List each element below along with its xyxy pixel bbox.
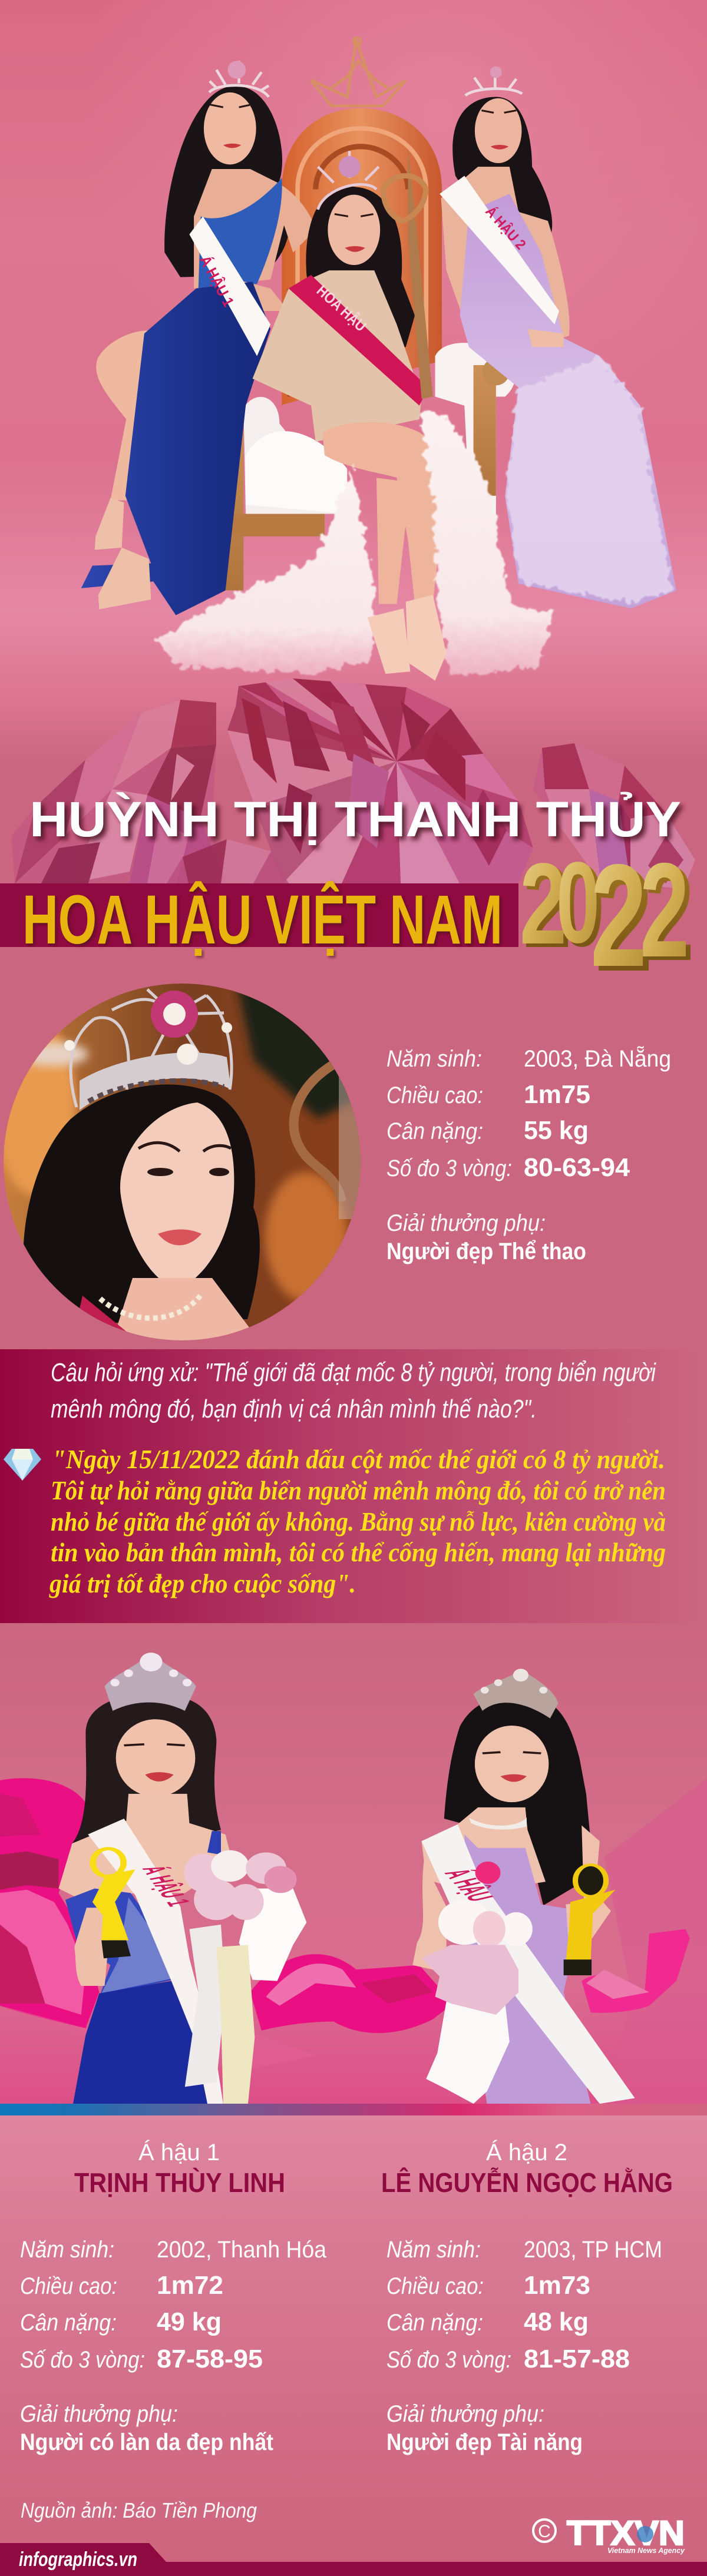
side award label: Giải thưởng phụ: <box>386 1210 546 1236</box>
neck and chest <box>117 1278 249 1340</box>
question text: mênh mông đó, bạn định vị cá nhân mình thế nào?". <box>51 1395 537 1423</box>
answer text: "Ngày 15/11/2022 đánh dấu cột mốc thế giới có 8 tỷ người. <box>52 1444 665 1474</box>
runner-up 1 heading: TRỊNH THÙY LINH <box>74 2167 285 2198</box>
gold 3D year 2022: 2 <box>590 833 647 997</box>
runner-up 1 stats: 49 kg <box>157 2307 222 2336</box>
gold 3D year 2022: 0 <box>560 842 604 971</box>
gold 3D year 2022: 2 <box>595 838 653 1002</box>
decorative pink diamond right <box>530 739 698 892</box>
runner-up 1 stats: Chiều cao: <box>20 2273 117 2299</box>
runner-up 2 stats: 81-57-88 <box>524 2345 630 2373</box>
gold 3D year 2022: 2 <box>520 839 567 968</box>
runner-ups section background <box>0 1623 707 2104</box>
footer band <box>0 2543 707 2576</box>
bouquet top orchids <box>438 1900 533 1947</box>
title band <box>0 883 518 947</box>
side award value: Người đẹp Thể thao <box>386 1239 586 1264</box>
runner-up 2 stats: Năm sinh: <box>386 2237 481 2263</box>
bouquet lower orchids <box>426 2001 510 2104</box>
throne crown ornament <box>311 38 406 106</box>
face <box>120 1102 234 1290</box>
centre winner: Hoa hậu: HOA HẬU <box>313 282 370 335</box>
runner-up 2 stats: Chiều cao: <box>386 2273 484 2299</box>
left runner-up: blue gown <box>81 61 316 615</box>
runner-up 1 photo <box>58 1694 306 2104</box>
decorative pink diamond centre <box>224 677 536 889</box>
skirt <box>73 1980 223 2104</box>
scepter <box>294 1057 348 1201</box>
runner-up 1 stats: Người có làn da đẹp nhất <box>20 2429 273 2455</box>
runner-up 2 stats: 1m73 <box>524 2271 590 2300</box>
shoulders and chest <box>58 1794 232 1902</box>
runner-up 1 heading <box>74 2139 285 2198</box>
panel: question and answer <box>0 1349 707 1623</box>
copyright mark: C <box>538 2522 551 2541</box>
sash <box>88 1819 223 2104</box>
bouquet white orchids and ribbons <box>185 1889 306 2087</box>
portrait of the winner in circle <box>0 978 365 1349</box>
photo source note: Nguồn ảnh: Báo Tiền Phong <box>21 2498 257 2522</box>
runner-up 1 stats: Giải thưởng phụ: <box>20 2401 178 2427</box>
throne chair seat and armrests <box>221 343 516 591</box>
runner-up 2 stats: Cân nặng: <box>386 2310 483 2336</box>
bouquet pink roses <box>422 1945 518 2015</box>
crown <box>71 989 232 1107</box>
face <box>116 1719 195 1797</box>
hero background <box>0 0 707 766</box>
runner-up 2 heading: Á hậu 2 <box>486 2139 567 2166</box>
runner-up 2 heading: LÊ NGUYỄN NGỌC HẰNG <box>381 2167 673 2198</box>
throne back <box>279 108 442 406</box>
measurements value: 80-63-94 <box>524 1153 630 1182</box>
gown <box>464 1835 591 2104</box>
question text <box>51 1358 656 1423</box>
arms <box>412 1862 447 1969</box>
copyright mark <box>533 2519 556 2542</box>
runner-up 1 stats: 2002, Thanh Hóa <box>157 2237 327 2263</box>
sash label: Á HẬU 1 <box>135 1863 197 1908</box>
centre winner: Hoa hậu <box>156 149 554 681</box>
hair <box>72 1694 221 1843</box>
left runner-up: blue gown: Á HẬU 1 <box>196 253 237 310</box>
answer text <box>49 1444 666 1598</box>
trophy <box>92 1849 136 1958</box>
weight value: 55 kg <box>524 1116 589 1145</box>
footer site name: infographics.vn <box>19 2548 137 2571</box>
runner-up 2 stats: 48 kg <box>524 2307 589 2336</box>
runner-up 2 stats <box>386 2237 662 2455</box>
subtitle: Hoa hậu Việt Nam: HOA HẬU VIỆT NAM <box>22 880 503 959</box>
measurements label: Số đo 3 vòng: <box>386 1155 512 1181</box>
right runner-up: lilac gown <box>440 66 676 608</box>
trophy <box>564 1865 616 1975</box>
decorative pink diamond left <box>11 700 217 883</box>
birth label: Năm sinh: <box>386 1046 482 1072</box>
pink ribbons behind runner-ups <box>0 1778 707 2105</box>
TTXVN logo: TTXVN <box>567 2514 685 2552</box>
sash <box>422 1825 635 2104</box>
runner-up 2 stats: Giải thưởng phụ: <box>386 2401 544 2427</box>
runner-up 2 heading <box>381 2139 673 2198</box>
shoulders and chest <box>422 1807 546 1893</box>
runner-up 1 stats <box>20 2237 327 2455</box>
TTXVN logo: Vietnam News Agency <box>607 2546 685 2555</box>
winner stats <box>386 1045 671 1264</box>
hero photo: three winners on throne <box>81 38 676 681</box>
hair <box>444 1695 591 1905</box>
gold 3D year 2022: 2 <box>523 843 571 972</box>
runner-up 2 stats: Số đo 3 vòng: <box>386 2347 511 2373</box>
face <box>475 1726 549 1802</box>
dress strap <box>207 1831 221 1855</box>
colour strip divider <box>0 2104 707 2115</box>
right runner-up: lilac gown: Á HẬU 2 <box>483 203 530 253</box>
answer text: giá trị tốt đẹp cho cuộc sống". <box>49 1568 356 1598</box>
main title: winner name: HUỲNH THỊ THANH THỦY <box>29 792 681 847</box>
pink flower badge <box>475 1862 500 1884</box>
runner-up 1 stats: Cân nặng: <box>20 2310 117 2336</box>
runner-up 2 stats: 2003, TP HCM <box>524 2237 662 2263</box>
weight label: Cân nặng: <box>386 1118 483 1144</box>
runner-up 2 tiara <box>474 1669 558 1719</box>
bouquet tassel <box>216 1945 255 2104</box>
arm <box>74 1908 114 1986</box>
birth value: 2003, Đà Nẵng <box>524 1045 671 1072</box>
runner-up 1 heading: Á hậu 1 <box>138 2139 220 2166</box>
hair <box>23 1084 260 1325</box>
runner-up 1 stats: 1m72 <box>157 2271 223 2300</box>
runner-up 2 photo <box>412 1695 635 2104</box>
sash label: Á HẬU <box>437 1866 501 1904</box>
answer text: tin vào bản thân mình, tôi có thể cống hiến, mang lại những <box>51 1537 666 1567</box>
necklace <box>469 1817 527 1830</box>
runner-up 1 stats: 87-58-95 <box>157 2345 263 2373</box>
runner-up 2 stats: Người đẹp Tài năng <box>386 2429 583 2455</box>
gold 3D year 2022: 0 <box>556 838 600 967</box>
gold 3D year 2022 <box>520 833 694 1002</box>
icon: diamond <box>4 1449 41 1481</box>
dress bodice <box>65 1889 174 1995</box>
height value: 1m75 <box>524 1080 590 1109</box>
bottom panel background <box>0 2115 707 2576</box>
runner-up 1 stats: Số đo 3 vòng: <box>20 2347 145 2373</box>
bouquet pink flowers <box>184 1850 297 1920</box>
runner-up 1 tiara <box>105 1653 196 1711</box>
runner-up 1 stats: Năm sinh: <box>20 2237 114 2263</box>
small diamond under title <box>167 839 289 883</box>
height label: Chiều cao: <box>386 1082 483 1108</box>
